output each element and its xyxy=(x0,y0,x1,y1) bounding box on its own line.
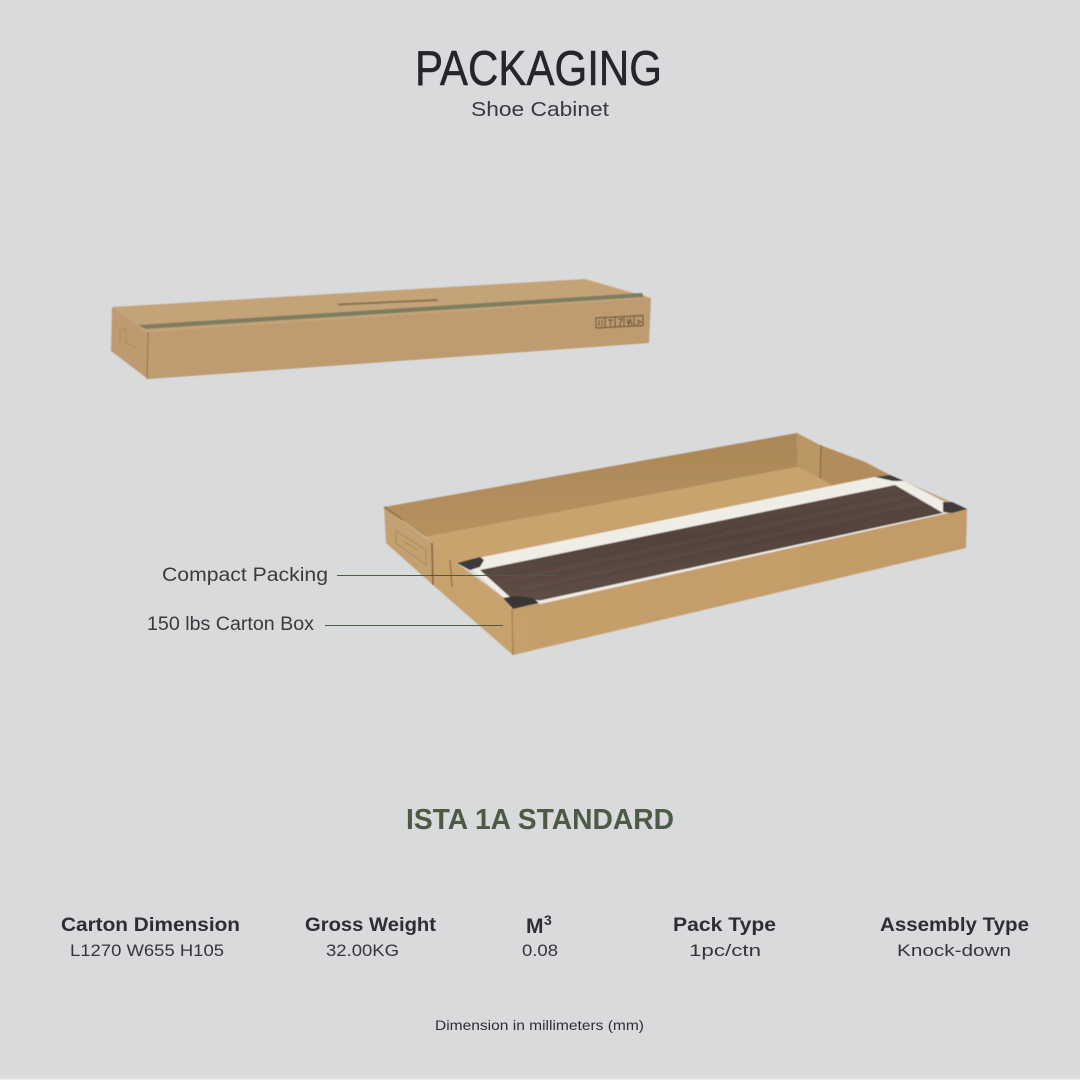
right inner wall xyxy=(819,445,890,485)
top logo mark xyxy=(338,300,438,304)
end panel print xyxy=(120,329,137,348)
closed carton box xyxy=(111,279,651,379)
box front face xyxy=(146,298,651,379)
black corner protector: back xyxy=(875,475,904,481)
left end flap xyxy=(384,507,433,585)
black corner protector: front xyxy=(503,596,539,609)
right inner flap xyxy=(797,433,820,478)
green tape stripe xyxy=(138,293,644,329)
spec: carton dimension xyxy=(61,915,240,960)
spec: pack type: Pack Type xyxy=(673,915,776,936)
spec: cubic metres: 3 xyxy=(544,912,552,928)
spec: assembly type: Knock-down xyxy=(897,941,1011,960)
white foam board xyxy=(470,477,947,604)
spec: carton dimension: L1270 W655 H105 xyxy=(70,941,224,960)
spec: cubic metres: 0.08 xyxy=(522,941,558,960)
spec: gross weight xyxy=(305,915,437,960)
spec: carton dimension: Carton Dimension xyxy=(61,915,240,936)
spec: pack type: 1pc/ctn xyxy=(689,941,761,960)
handling pictograms xyxy=(596,316,643,328)
end flap print xyxy=(396,531,426,565)
callout: compact packing: Compact Packing xyxy=(162,565,328,586)
spec: assembly type xyxy=(880,915,1029,960)
box top face xyxy=(112,279,651,332)
walnut panel xyxy=(480,485,943,600)
black corner protector: left xyxy=(457,557,484,570)
open carton box xyxy=(384,433,967,655)
left outer face xyxy=(432,543,513,655)
spec: gross weight: Gross Weight xyxy=(305,915,437,936)
standard heading: ISTA 1A STANDARD xyxy=(406,804,674,836)
wood grain xyxy=(495,492,932,592)
front outer face xyxy=(512,509,967,655)
spec: cubic metres xyxy=(522,912,558,960)
spec: gross weight: 32.00KG xyxy=(326,941,399,960)
spec: cubic metres: M xyxy=(526,915,544,938)
spec: pack type xyxy=(673,915,776,960)
black corner protector: right xyxy=(943,502,967,513)
spec: assembly type: Assembly Type xyxy=(880,915,1029,936)
box left end face xyxy=(111,307,148,379)
far rim strip xyxy=(890,475,967,513)
back wall inside xyxy=(384,433,798,537)
carton floor xyxy=(425,467,875,609)
footnote: Dimension in millimeters (mm) xyxy=(435,1018,644,1033)
subtitle: Shoe Cabinet xyxy=(471,98,609,121)
callout: carton box: 150 lbs Carton Box xyxy=(147,614,315,635)
title: PACKAGING xyxy=(415,42,662,96)
